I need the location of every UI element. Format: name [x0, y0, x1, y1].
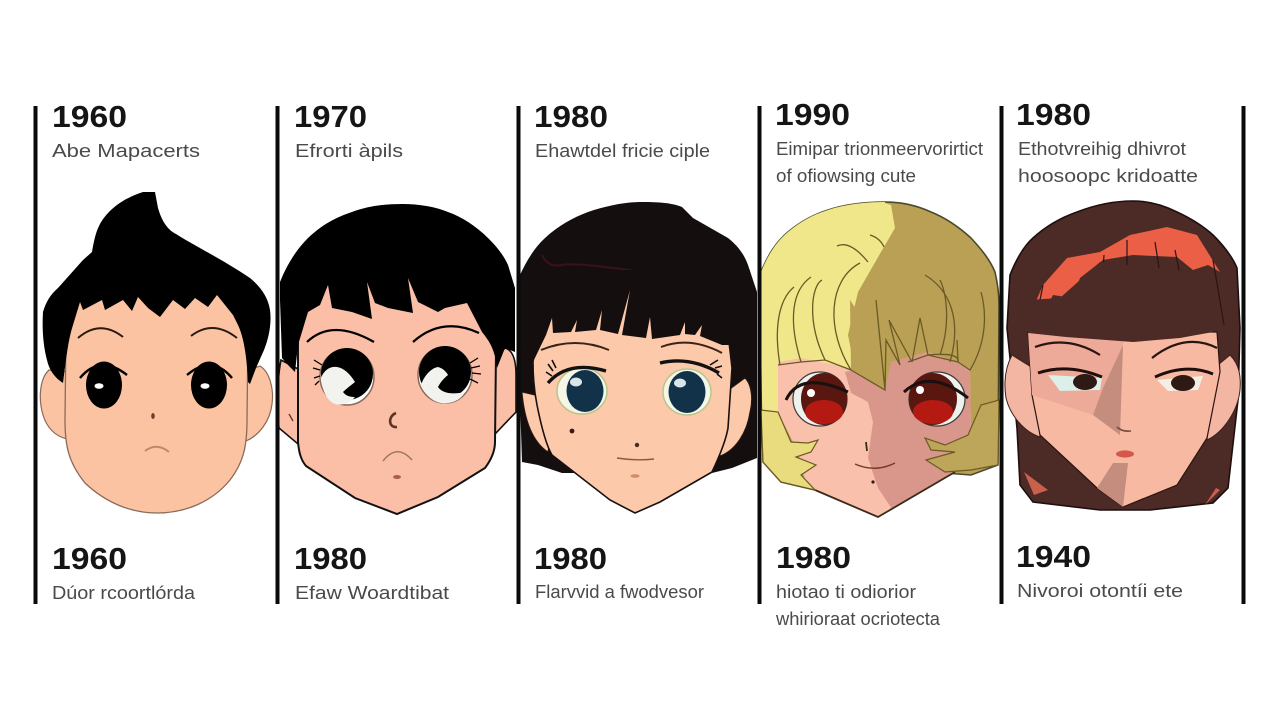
hair sheen [542, 255, 650, 273]
hair highlight [1033, 227, 1220, 310]
fringe [1028, 262, 1215, 342]
column 5 bottom caption: 1940 [1016, 539, 1091, 574]
hair tips [1024, 472, 1220, 505]
hair base [761, 202, 999, 490]
back hair [520, 202, 757, 473]
timeline divider bars [34, 106, 1246, 604]
ears [522, 378, 752, 456]
hair back [1007, 201, 1240, 510]
hair strands [1036, 240, 1224, 330]
column 2 top caption: Efrorti àpils [295, 141, 403, 161]
column 1 top caption [52, 99, 200, 161]
nose and mouth [145, 413, 169, 452]
ears [278, 348, 516, 444]
eyebrows [78, 328, 237, 338]
eyes [786, 372, 968, 426]
face shape [1028, 332, 1220, 507]
column 5 top caption: hoosoopc kridoatte [1018, 166, 1198, 186]
column 2 bottom caption: 1980 [294, 541, 367, 576]
eyes [1038, 369, 1213, 391]
column 5 top caption: Ethotvreihig dhivrot [1018, 139, 1186, 159]
column 4 top caption: of ofiowsing cute [776, 166, 916, 186]
eyebrows [541, 343, 722, 353]
column 5 bottom caption [1016, 539, 1183, 601]
column 5 top caption: 1980 [1016, 97, 1091, 132]
nose, mouth and dot [855, 442, 895, 484]
column 4 top caption: 1990 [775, 97, 850, 132]
column 1 bottom caption: Dúor rcoortlórda [52, 583, 196, 603]
fringe [525, 270, 750, 362]
column 1 top caption: Abe Mapacerts [52, 141, 200, 161]
face 3: bobbed black hair with blue eyes [520, 202, 757, 513]
column 2 top caption: 1970 [294, 99, 367, 134]
hair [43, 192, 271, 384]
column 4 bottom caption [775, 540, 941, 629]
hair strands [777, 235, 984, 390]
face 1: round child with black quiff [40, 192, 272, 513]
fringe shadow [850, 300, 891, 390]
column 4 bottom caption: whirioraat ocriotecta [775, 609, 941, 629]
face 4: blonde hair with red eyes [761, 202, 999, 517]
face shape [533, 280, 732, 513]
eyes [546, 360, 722, 415]
hair highlight [761, 202, 895, 482]
face 5: brown hair with angular features [1005, 201, 1240, 510]
column 4 bottom caption: 1980 [776, 540, 851, 575]
face 2: large round eyes with black hair [278, 204, 516, 514]
column 3 top caption: 1980 [534, 99, 608, 134]
hair [280, 204, 515, 372]
column 2 bottom caption [294, 541, 449, 603]
eyes [80, 362, 232, 408]
column 4 top caption [775, 97, 983, 186]
column 1 bottom caption: 1960 [52, 541, 127, 576]
eyebrows [1035, 342, 1217, 358]
face shape [298, 260, 497, 514]
jaw line [815, 472, 955, 517]
column 1 top caption: 1960 [52, 99, 127, 134]
column 5 bottom caption: Nivoroi otontíi ete [1017, 581, 1183, 601]
nose, mouth and chin [289, 413, 412, 479]
ears [40, 366, 272, 441]
column 3 bottom caption [534, 541, 704, 602]
facial marks [570, 429, 654, 478]
column 5 top caption [1016, 97, 1198, 186]
column 2 bottom caption: Efaw Woardtibat [295, 583, 449, 603]
column 4 bottom caption: hiotao ti odiorior [776, 582, 916, 602]
column 3 bottom caption: Flarvvid a fwodvesor [535, 582, 704, 602]
face light [778, 352, 971, 517]
column 3 top caption [534, 99, 710, 161]
column 4 top caption: Eimipar trionmeervorirtict [776, 139, 983, 159]
nose and lips [1116, 427, 1134, 458]
column 3 top caption: Ehawtdel fricie ciple [535, 141, 710, 161]
column 2 top caption [294, 99, 403, 161]
eyes [313, 346, 481, 405]
column 3 bottom caption: 1980 [534, 541, 607, 576]
face shape [65, 290, 248, 513]
face shadow [845, 352, 971, 509]
side locks [761, 400, 999, 490]
eyebrows [307, 326, 479, 342]
column 1 bottom caption [52, 541, 196, 603]
ears [1005, 355, 1240, 440]
face shadows [1028, 332, 1128, 507]
